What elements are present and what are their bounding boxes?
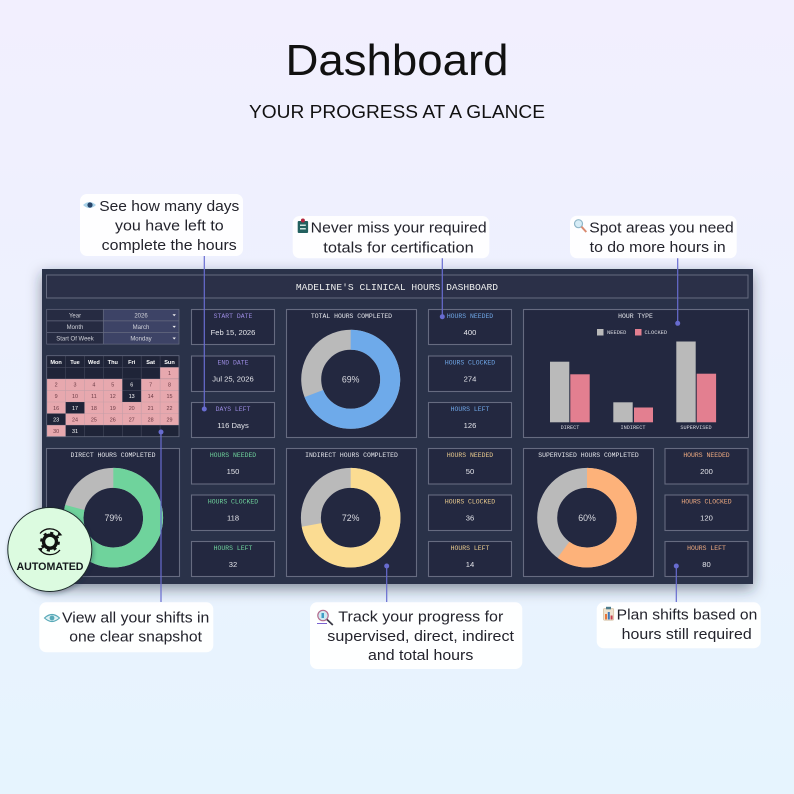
arrow: calendar	[158, 430, 164, 602]
calendar: 31	[72, 429, 78, 435]
card: indirect hours clocked	[428, 495, 512, 530]
card: supervised hours needed: HOURS NEEDED	[683, 452, 730, 459]
donut: direct hours: DIRECT HOURS COMPLETED	[70, 452, 156, 459]
calendar: 26	[110, 417, 116, 423]
calendar: 2	[55, 383, 58, 389]
icon: clipboard chart	[603, 607, 614, 620]
callout: track progress	[310, 602, 522, 669]
arrow: hours needed	[440, 258, 445, 319]
callout: spot areas: Spot areas you need	[589, 219, 734, 236]
donut: indirect hours: 72%	[342, 513, 360, 523]
card: direct hours clocked: 118	[227, 514, 239, 522]
calendar: Sun	[164, 360, 175, 366]
donut: indirect hours	[286, 448, 416, 576]
card: supervised hours needed	[665, 448, 748, 484]
icon: eye outline	[44, 614, 60, 622]
calendar: Mon	[50, 360, 62, 366]
card: days left: DAYS LEFT	[216, 406, 251, 413]
card: direct hours needed: 150	[227, 467, 239, 476]
card: start date: START DATE	[214, 313, 252, 320]
settings table: 2026	[134, 314, 148, 320]
card: total hours needed: HOURS NEEDED	[447, 313, 493, 320]
settings table	[47, 309, 179, 344]
card: end date	[192, 356, 274, 392]
chart legend: CLOCKED	[644, 330, 667, 336]
donut: direct hours: 79%	[104, 513, 122, 523]
settings table: Start Of Week	[56, 336, 95, 342]
callout: shifts snapshot: one clear snapshot	[69, 629, 203, 646]
calendar: 5	[111, 383, 114, 389]
icon: magnifier	[574, 220, 586, 232]
card: supervised hours clocked: 120	[700, 514, 713, 522]
card: total hours clocked: HOURS CLOCKED	[445, 360, 495, 366]
donut: total hours: 69%	[342, 374, 360, 384]
card: days left: 116 Days	[217, 421, 249, 430]
callout: track progress: and total hours	[368, 647, 473, 664]
card: total hours left: HOURS LEFT	[451, 406, 489, 413]
calendar: 15	[166, 394, 172, 400]
callout: track progress: Track your progress for	[338, 609, 503, 626]
card: indirect hours clocked: 36	[466, 514, 474, 522]
calendar: 1	[168, 371, 171, 377]
card: start date: Feb 15, 2026	[211, 328, 255, 337]
calendar: 17	[72, 406, 78, 412]
calendar: 6	[130, 383, 133, 389]
calendar: Fri	[128, 360, 136, 366]
calendar: 4	[92, 383, 95, 389]
subtitle: YOUR PROGRESS AT A GLANCE	[249, 102, 545, 122]
callout: certification totals: Never miss your required	[311, 220, 487, 237]
dashboard panel	[42, 269, 753, 584]
card: total hours clocked: 274	[464, 374, 476, 384]
arrow: days left	[202, 256, 207, 412]
donut: direct hours	[46, 448, 180, 576]
callout: plan shifts	[597, 602, 761, 648]
calendar: Thu	[108, 360, 119, 366]
bar chart: hour type: SUPERVISED	[680, 425, 712, 431]
calendar: 10	[72, 394, 78, 400]
calendar: 16	[53, 406, 59, 412]
card: indirect hours clocked: HOURS CLOCKED	[445, 498, 495, 506]
calendar: Tue	[70, 360, 80, 366]
card: direct hours needed	[192, 448, 274, 484]
card: days left	[192, 402, 274, 438]
arrow: hour type	[675, 258, 680, 326]
icon: rotating gear	[38, 529, 62, 555]
card: direct hours clocked	[192, 495, 274, 530]
card: supervised hours left: HOURS LEFT	[687, 545, 726, 552]
callout: shifts snapshot: View all your shifts in	[62, 610, 209, 627]
calendar: 14	[148, 394, 154, 400]
callout: track progress: supervised, direct, indirect	[327, 628, 515, 645]
bar chart: hour type: HOUR TYPE	[618, 313, 653, 320]
callout: certification totals: totals for certification	[323, 239, 474, 256]
card: supervised hours clocked	[665, 495, 748, 530]
calendar: Wed	[88, 360, 100, 366]
chart legend	[597, 329, 667, 336]
bar chart: hour type: DIRECT	[561, 425, 579, 431]
dashboard title bar	[46, 275, 748, 298]
card: start date	[192, 310, 274, 344]
icon: chart magnifier	[317, 610, 333, 625]
card: total hours needed: 400	[464, 328, 476, 337]
calendar: 25	[91, 417, 97, 423]
calendar: 21	[148, 406, 154, 412]
card: supervised hours left	[665, 542, 748, 576]
donut: supervised hours: SUPERVISED HOURS COMPLETED	[538, 452, 639, 459]
callout: spot areas	[570, 216, 737, 258]
calendar: 29	[166, 417, 172, 423]
callout: days left	[80, 194, 243, 256]
calendar: 18	[91, 406, 97, 412]
card: indirect hours needed: HOURS NEEDED	[447, 452, 493, 459]
card: indirect hours left	[428, 542, 512, 576]
icon: eye	[83, 202, 96, 208]
calendar: 8	[168, 383, 171, 389]
card: supervised hours left: 80	[702, 560, 711, 569]
calendar: 30	[53, 429, 59, 435]
card: total hours clocked	[428, 356, 512, 392]
card: indirect hours needed	[428, 448, 512, 484]
calendar: Sat	[146, 360, 155, 366]
callout: shifts snapshot	[39, 602, 213, 652]
title: Dashboard	[286, 36, 508, 85]
settings table: Month	[67, 325, 83, 331]
callout: days left: complete the hours	[102, 237, 237, 254]
callout: days left: See how many days	[99, 198, 239, 215]
arrow: indirect donut	[384, 564, 389, 602]
card: supervised hours clocked: HOURS CLOCKED	[681, 498, 732, 506]
bar chart: hour type: INDIRECT	[621, 425, 645, 431]
donut: total hours	[286, 310, 416, 438]
donut: total hours: TOTAL HOURS COMPLETED	[311, 313, 392, 320]
icon: clipboard	[298, 218, 308, 233]
calendar: 13	[129, 394, 135, 400]
donut: indirect hours: INDIRECT HOURS COMPLETED	[305, 452, 398, 459]
card: direct hours left	[192, 542, 274, 576]
calendar: 7	[149, 383, 152, 389]
card: end date: Jul 25, 2026	[212, 374, 254, 384]
calendar: 23	[53, 417, 59, 423]
bar chart: hour type	[524, 310, 748, 438]
calendar: 22	[166, 406, 172, 412]
card: total hours left	[428, 402, 512, 438]
calendar: 19	[110, 406, 116, 412]
settings table: Monday	[130, 336, 152, 342]
callout: spot areas: to do more hours in	[590, 239, 726, 256]
calendar: 27	[129, 417, 135, 423]
donut: supervised hours: 60%	[578, 513, 596, 523]
badge: automated	[8, 508, 92, 592]
card: total hours needed	[428, 310, 512, 344]
arrow: hours left	[674, 564, 679, 602]
settings table: March	[133, 325, 149, 331]
calendar: 11	[91, 394, 97, 400]
callout: plan shifts: Plan shifts based on	[617, 606, 757, 623]
card: direct hours left: 32	[229, 560, 237, 569]
calendar: 12	[110, 394, 116, 400]
calendar: 28	[148, 417, 154, 423]
callout: days left: you have left to	[115, 218, 224, 235]
callout: certification totals	[293, 216, 489, 258]
card: indirect hours left: 14	[466, 560, 474, 569]
donut: supervised hours	[524, 448, 654, 576]
card: total hours left: 126	[464, 421, 476, 430]
card: indirect hours left: HOURS LEFT	[451, 545, 489, 552]
calendar	[47, 356, 179, 437]
calendar: 20	[129, 406, 135, 412]
callout: plan shifts: hours still required	[622, 626, 752, 643]
settings table: Year	[69, 314, 81, 320]
calendar: 24	[72, 417, 78, 423]
calendar: 3	[74, 383, 76, 389]
card: direct hours needed: HOURS NEEDED	[210, 452, 256, 459]
card: direct hours left: HOURS LEFT	[214, 545, 252, 552]
calendar: 9	[55, 394, 58, 400]
card: direct hours clocked: HOURS CLOCKED	[208, 498, 258, 506]
badge: automated: AUTOMATED	[16, 561, 84, 573]
chart legend: NEEDED	[607, 330, 626, 336]
dashboard title bar: MADELINE'S CLINICAL HOURS DASHBOARD	[296, 282, 498, 293]
card: indirect hours needed: 50	[466, 467, 474, 476]
card: end date: END DATE	[218, 360, 249, 366]
card: supervised hours needed: 200	[700, 467, 713, 476]
